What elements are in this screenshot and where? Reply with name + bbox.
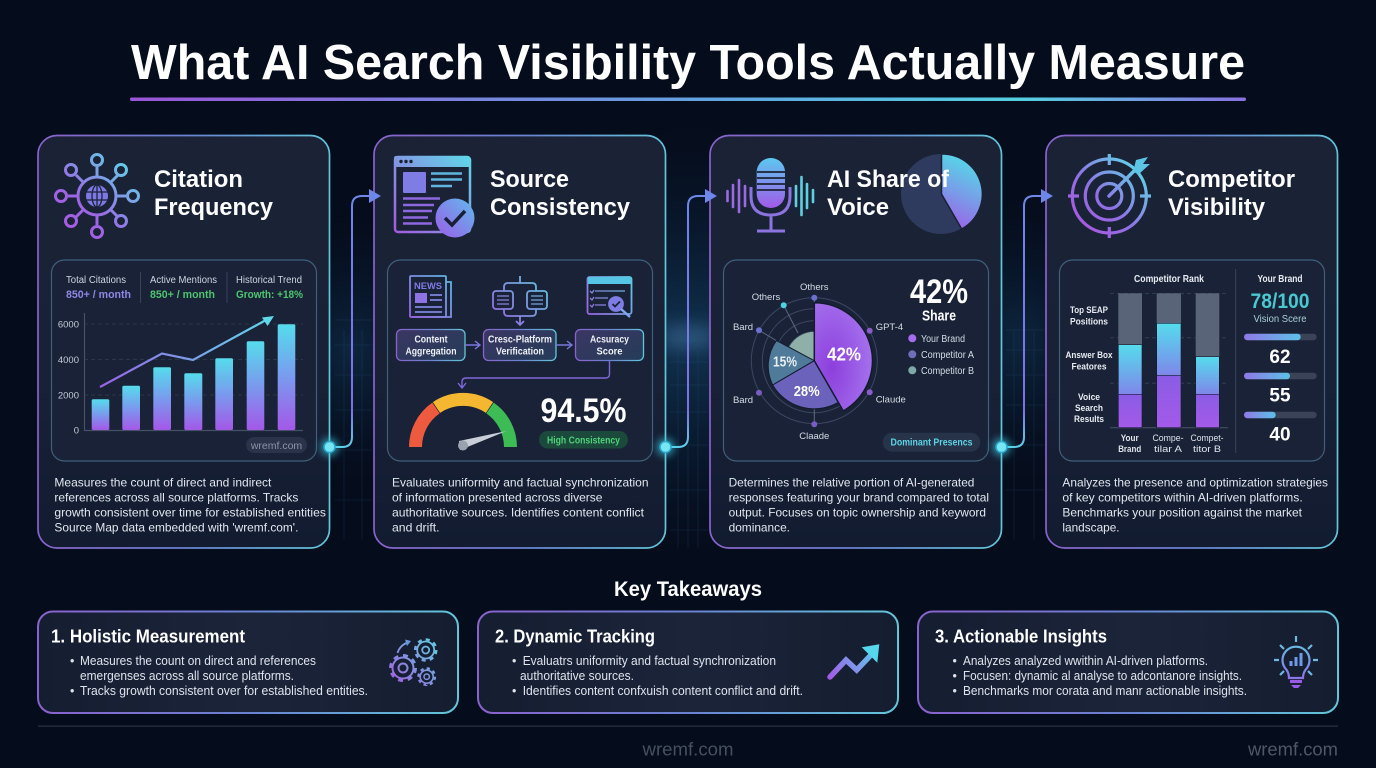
status pill: High Consistency — [547, 436, 620, 446]
icon: target — [1068, 154, 1151, 238]
bullets: Focusen: dynamic al analyse to adcontanore insights. — [963, 669, 1242, 683]
takeaway: dynamic tracking — [478, 612, 898, 713]
step: accuracy score — [576, 330, 644, 360]
heading — [1168, 166, 1295, 221]
heading: Visibility — [1168, 194, 1266, 221]
metric: historical trend: Historical Trend — [236, 275, 302, 286]
metric: historical trend: Growth: +18% — [236, 289, 303, 301]
takeaway: actionable insights — [918, 612, 1338, 713]
stacked bar chart: titor B — [1193, 444, 1221, 455]
panel: citation frequency — [38, 136, 330, 548]
bullets: Identifies content confxuish content conflict and drift. — [523, 684, 803, 698]
bullets: Analyzes analyzed wwithin AI-driven platforms. — [963, 654, 1208, 668]
connector: card 2 to card 3 — [656, 189, 717, 456]
description: dominance. — [729, 521, 790, 535]
brand score: 78/100 — [1250, 290, 1310, 313]
share panel — [724, 260, 988, 461]
share value: Share — [922, 308, 956, 324]
title underline — [130, 98, 1246, 101]
watermark badge — [246, 437, 307, 453]
stacked bar chart: Compe- — [1152, 433, 1184, 444]
bullets: Evaluatrs uniformity and factual synchronization — [523, 654, 776, 668]
description: growth consistent over time for established entities — [54, 506, 326, 520]
heading: Frequency — [154, 194, 274, 221]
description: output. Focuses on topic ownership and keyword — [729, 506, 986, 520]
watermark badge: wremf.com — [250, 440, 302, 452]
rank panel — [1060, 260, 1324, 461]
connector: card 1 to card 2 — [320, 189, 381, 456]
description: of information presented across diverse — [392, 491, 603, 505]
bar chart: 6000 — [58, 320, 79, 330]
stacked bar chart: Voice — [1078, 392, 1100, 403]
bar chart: 2000 — [58, 390, 79, 402]
description — [54, 476, 326, 535]
metric: total citations: 850+ / month — [66, 289, 131, 301]
radar pie chart: GPT-4 — [876, 322, 903, 333]
panel: competitor visibility — [1046, 136, 1338, 548]
step: content aggregation: Aggregation — [406, 346, 456, 358]
heading: Consistency — [490, 194, 631, 221]
radar pie chart: 42% — [827, 344, 861, 364]
brand score: 40 — [1269, 425, 1291, 446]
heading: Voice — [827, 194, 889, 221]
icon: citation network — [56, 154, 138, 238]
brand score: 62 — [1269, 347, 1291, 368]
bar chart: 4000 — [58, 355, 79, 366]
radar pie chart: Others — [752, 292, 781, 303]
heading: AI Share of — [827, 166, 950, 193]
stacked bar chart: tilar A — [1154, 444, 1183, 455]
icon: microphone — [728, 158, 813, 231]
icon: gears — [390, 640, 436, 685]
stacked bar chart: Compet- — [1190, 433, 1224, 444]
radar pie chart: Claade — [799, 431, 829, 442]
share value — [910, 273, 968, 324]
step: cross-platform verification: Verification — [496, 346, 544, 358]
arrow — [556, 341, 572, 349]
radar pie chart — [733, 282, 906, 442]
step: accuracy score: Acsuracy — [590, 334, 629, 346]
bullets: • — [512, 654, 516, 668]
description: landscape. — [1062, 521, 1120, 535]
stacked bar chart: Featores — [1072, 362, 1106, 373]
bullets: • — [952, 669, 957, 683]
stacked bar chart: Positions — [1070, 316, 1108, 327]
description: Determines the relative portion of AI-generated — [729, 476, 974, 490]
takeaway: holistic measurement — [38, 612, 458, 713]
bar chart: 0 — [74, 426, 79, 436]
takeaway: dynamic tracking: 2. Dynamic Tracking — [495, 627, 655, 647]
heading: Competitor — [1168, 166, 1295, 193]
radar pie chart: Claude — [876, 394, 906, 406]
description — [1062, 476, 1328, 535]
bullets: emergenses across all source platforms. — [80, 669, 294, 683]
share value: 42% — [910, 273, 968, 311]
bullets: • — [70, 654, 74, 668]
footer watermark center: wremf.com — [641, 740, 734, 760]
legend: Your Brand — [921, 334, 965, 345]
heading: Source — [490, 166, 569, 193]
legend — [908, 334, 974, 377]
description: references across all source platforms. Tracks — [54, 491, 298, 505]
panel: source consistency — [374, 136, 666, 548]
brand score — [1244, 274, 1317, 446]
heading — [154, 166, 274, 221]
description — [729, 476, 989, 535]
step: cross-platform verification: Cresc-Platform — [488, 334, 552, 346]
footer watermark right: wremf.com — [1247, 740, 1338, 760]
description: and drift. — [392, 521, 440, 535]
metric: active mentions: Active Mentions — [150, 275, 217, 286]
footer divider — [38, 726, 1338, 727]
description: of key competitors within AI-driven platforms. — [1062, 491, 1303, 505]
metric: historical trend — [236, 275, 303, 301]
bullets: authoritative sources. — [520, 669, 634, 683]
bullets — [952, 654, 1247, 698]
heading — [827, 166, 950, 221]
step: content aggregation: Content — [414, 334, 448, 346]
stacked bar chart: Competitor Rank — [1134, 274, 1204, 285]
bullets: Benchmarks mor corata and manr actionable insights. — [963, 684, 1247, 698]
chart panel — [52, 260, 316, 461]
section heading: Key Takeaways — [614, 578, 762, 601]
description: Evaluates uniformity and factual synchronization — [392, 476, 648, 490]
bullets: • — [70, 684, 74, 698]
radar pie chart: Bard — [733, 322, 753, 333]
icon: browser check — [394, 156, 474, 238]
stacked bar chart: Your — [1121, 433, 1139, 444]
bullets: Measures the count on direct and references — [80, 654, 316, 668]
arrow — [465, 341, 480, 349]
description: Source Map data embedded with 'wremf.com'. — [54, 521, 298, 535]
bullets: Tracks growth consistent over for established entities. — [80, 684, 368, 698]
radar pie chart: 15% — [773, 354, 797, 371]
metric: active mentions: 850+ / month — [150, 289, 215, 301]
description: responses featuring your brand compared to total — [729, 491, 989, 505]
radar pie chart: Others — [800, 282, 829, 293]
stacked bar chart — [1066, 274, 1228, 455]
brand score: 55 — [1269, 386, 1291, 407]
stacked bar chart: Answer Box — [1066, 350, 1113, 361]
score value: 94.5% — [540, 392, 626, 430]
stacked bar chart: Top SEAP — [1070, 305, 1109, 316]
gauge — [416, 399, 510, 450]
description: Analyzes the presence and optimization strategies — [1062, 476, 1328, 490]
legend: Competitor B — [921, 366, 974, 377]
icon: light bulb — [1274, 636, 1318, 688]
heading: Citation — [154, 166, 243, 193]
bullets — [70, 654, 368, 698]
icon: pie — [901, 154, 982, 234]
metric: total citations — [66, 275, 131, 301]
stacked bar chart: Brand — [1118, 444, 1141, 455]
stacked bar chart: Search — [1075, 403, 1103, 414]
icon: cross-platform flow — [493, 276, 547, 325]
takeaway: holistic measurement: 1. Holistic Measurement — [51, 627, 245, 647]
metric: active mentions — [150, 275, 217, 301]
bullets: • — [952, 654, 957, 668]
status pill — [883, 433, 980, 452]
step: content aggregation — [396, 330, 465, 360]
icon: accuracy score — [588, 277, 632, 317]
brand score: Your Brand — [1258, 274, 1302, 285]
legend: Competitor A — [921, 350, 974, 361]
heading — [490, 166, 631, 221]
icon: news: NEWS — [414, 281, 442, 291]
bullets: • — [512, 684, 516, 698]
step: accuracy score: Score — [596, 346, 623, 358]
status pill: Dominant Presencs — [890, 438, 973, 448]
step: cross-platform verification — [484, 330, 556, 360]
connector: card 3 to card 4 — [992, 189, 1053, 456]
bullets — [512, 654, 803, 698]
description: Benchmarks your position against the market — [1062, 506, 1303, 520]
description: authoritative sources. Identifies content conflict — [392, 506, 645, 520]
process panel — [388, 260, 652, 461]
panel: AI share of voice — [710, 136, 1002, 548]
bar chart — [58, 313, 303, 436]
brand score: Vision Scere — [1254, 313, 1307, 325]
radar pie chart: 28% — [794, 383, 820, 400]
stacked bar chart: Results — [1074, 414, 1104, 425]
metric: total citations: Total Citations — [66, 275, 126, 286]
bullets: • — [952, 684, 957, 698]
title: What AI Search Visibility Tools Actually Measure — [131, 36, 1245, 90]
status pill — [539, 431, 628, 448]
icon: rising arrow — [830, 644, 879, 677]
description — [392, 476, 648, 535]
connector arrow to gauge — [458, 361, 610, 388]
trend arrow — [100, 316, 274, 387]
takeaway: actionable insights: 3. Actionable Insights — [935, 627, 1107, 647]
icon: news — [410, 276, 451, 317]
description: Measures the count of direct and indirect — [54, 476, 272, 490]
radar pie chart: Bard — [733, 395, 753, 406]
